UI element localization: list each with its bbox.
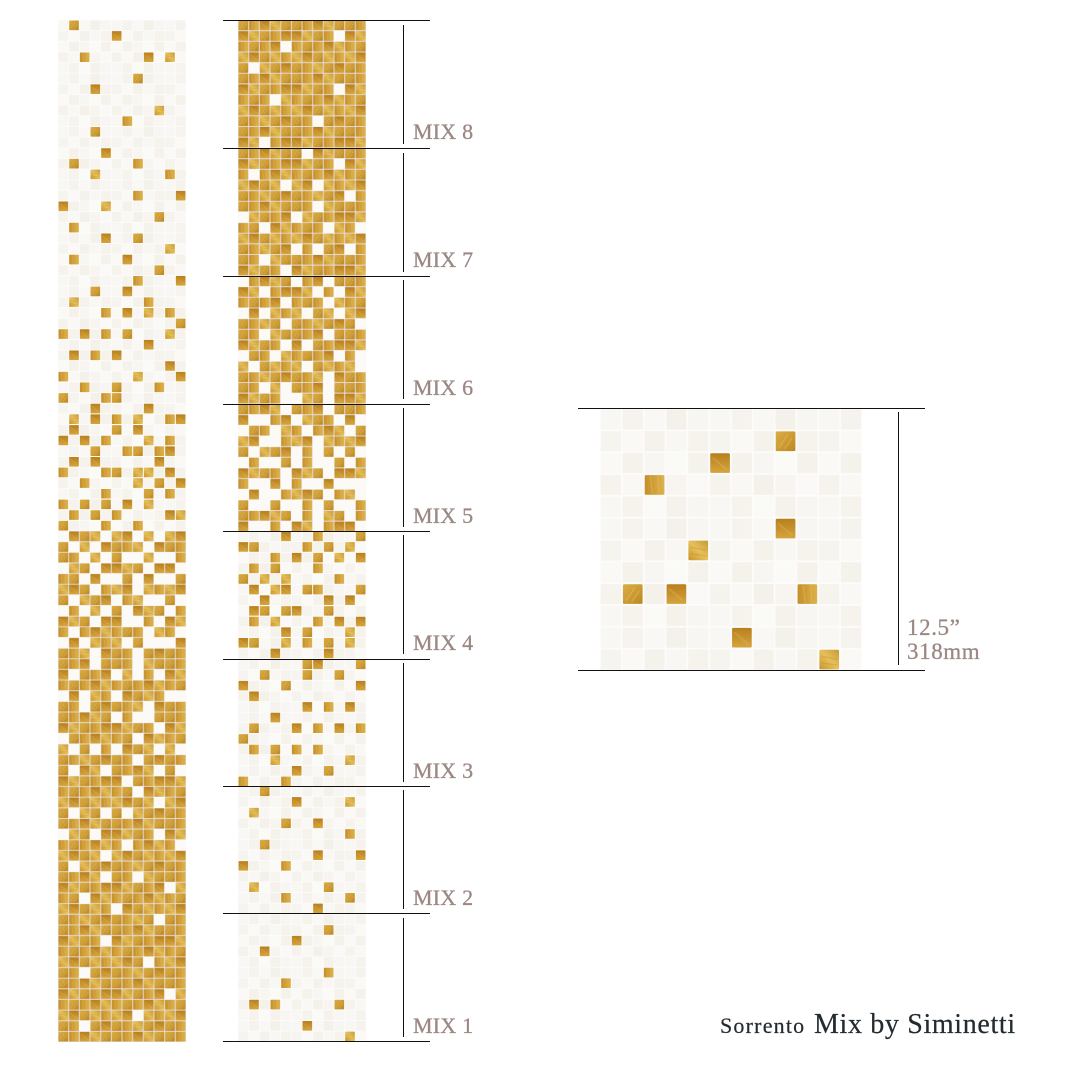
- panel: MIX 8 swatch: [238, 20, 366, 148]
- caption: Sorrento Mix by Siminetti: Sorrento: [720, 1013, 805, 1038]
- strip: dense gold section: [58, 531, 186, 1042]
- caption: Sorrento Mix by Siminetti: Mix by Siminetti: [814, 1009, 1016, 1040]
- panel: MIX 5 swatch: [238, 404, 366, 532]
- panel: MIX 3 swatch: [238, 659, 366, 787]
- label: MIX 5: MIX 5: [413, 503, 473, 528]
- mix dimension rules: [223, 20, 430, 1042]
- sheet dimension rules: [578, 408, 925, 670]
- panel: MIX 7 swatch: [238, 148, 366, 276]
- dimension: 318mm: 318mm: [907, 639, 980, 664]
- dimension: 12.5 inches: 12.5”: [907, 615, 960, 640]
- panel: MIX 2 swatch: [238, 786, 366, 914]
- panel: large single sheet detail: [600, 408, 862, 670]
- label: MIX 6: MIX 6: [413, 375, 473, 400]
- label: MIX 7: MIX 7: [413, 247, 473, 272]
- label: MIX 1: MIX 1: [413, 1013, 473, 1038]
- full range mosaic strip: [58, 20, 186, 1042]
- label: MIX 4: MIX 4: [413, 630, 473, 655]
- strip: sparse pearl section: [58, 20, 186, 531]
- panel: MIX 4 swatch: [238, 531, 366, 659]
- panel: MIX 1 swatch: [238, 914, 366, 1042]
- panel: MIX 6 swatch: [238, 276, 366, 404]
- label: MIX 8: MIX 8: [413, 119, 473, 144]
- label: MIX 2: MIX 2: [413, 885, 473, 910]
- label: MIX 3: MIX 3: [413, 758, 473, 783]
